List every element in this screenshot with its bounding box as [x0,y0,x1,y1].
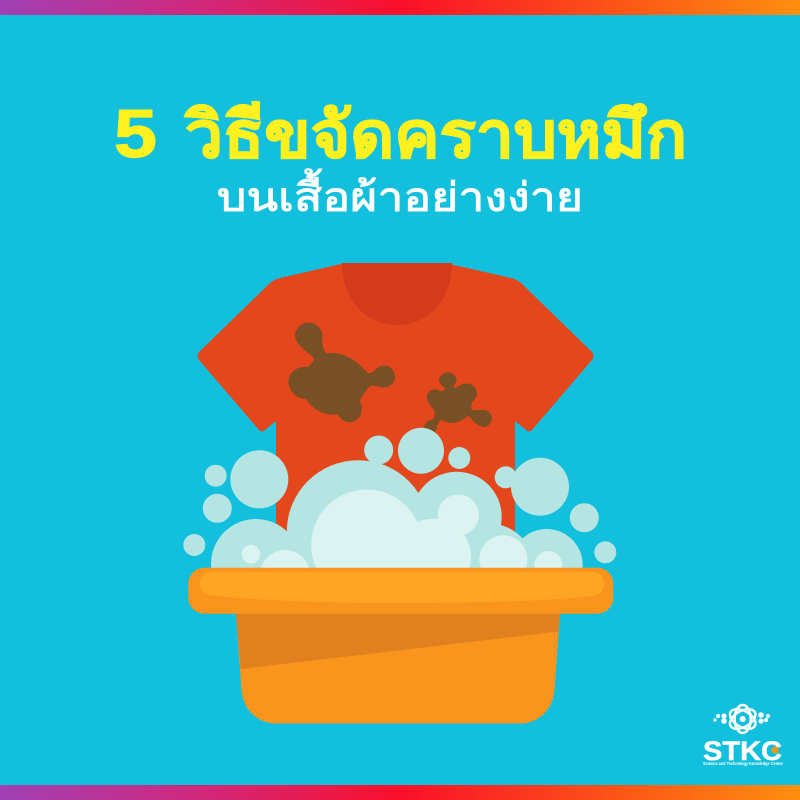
logo: STKC [703,705,783,766]
top gradient bar [0,0,800,15]
title: วิธีขจัดคราบหมึก [184,99,687,171]
logo atom icon [727,705,759,733]
title: 5 [114,96,157,172]
illustration: soap foam [183,428,616,568]
bottom gradient bar [0,785,800,800]
basin rim [188,568,613,614]
foam highlights [242,490,562,568]
foam bubbles [183,428,616,563]
logo accent dot [772,746,778,754]
foam mass [211,460,583,568]
illustration: orange wash basin [188,568,613,724]
large ink stain [288,322,395,422]
rim highlight [200,572,604,603]
basin shadow [236,613,560,669]
illustration: stained t-shirt [198,263,594,540]
logo dots [713,712,770,724]
small ink stain [424,372,492,434]
shirt collar [342,263,452,325]
subtitle: บนเสื้อผ้าอย่างง่าย [217,168,583,220]
logo wordmark: STKC [703,736,782,766]
logo tagline: Science and Technology Knowledge Center [703,761,783,766]
